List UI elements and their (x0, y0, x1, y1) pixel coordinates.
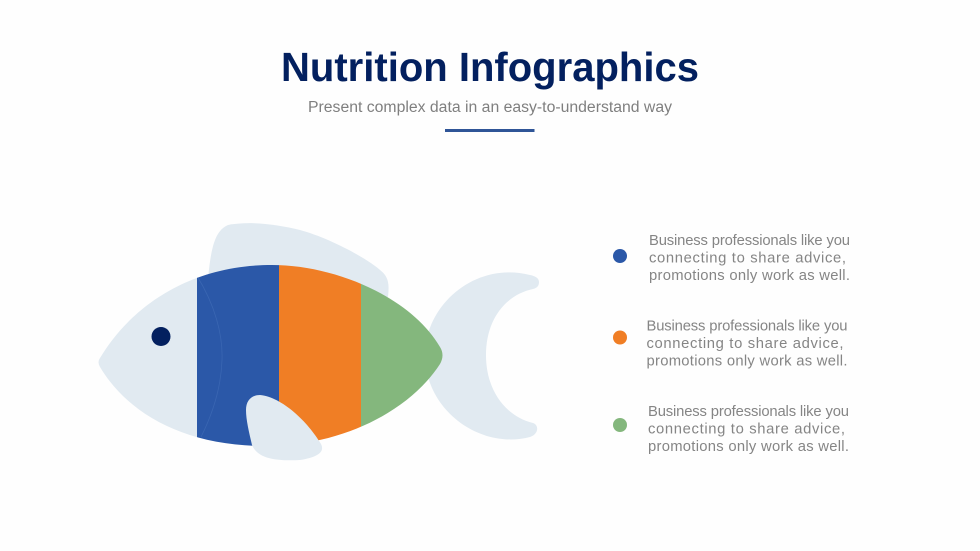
blue text: connecting to share advice, (649, 250, 846, 266)
green text: connecting to share advice, (648, 422, 845, 438)
blue text: Business professionals like you (649, 233, 850, 249)
orange dot (613, 330, 627, 344)
pectoral fin (246, 395, 322, 460)
blue dot (613, 249, 627, 263)
orange text: promotions only work as well. (646, 354, 848, 370)
eye (152, 327, 170, 346)
dorsal fin (208, 223, 389, 297)
body orange section (279, 260, 361, 450)
orange text: connecting to share advice, (646, 336, 844, 352)
title underline (445, 129, 534, 132)
legend item: orange (613, 318, 848, 370)
blue text: promotions only work as well. (649, 268, 850, 284)
green text: promotions only work as well. (648, 439, 849, 455)
body head section (98, 278, 197, 437)
body green section (361, 284, 442, 427)
gill line (197, 276, 222, 437)
orange text: Business professionals like you (646, 318, 848, 334)
title: Nutrition Infographics (281, 44, 699, 90)
legend item: green (613, 404, 849, 455)
tail fin (425, 272, 539, 439)
body blue section (197, 260, 279, 450)
legend item: blue (613, 233, 850, 284)
subtitle: Present complex data in an easy-to-understand way (308, 99, 672, 116)
fish illustration (95, 223, 539, 460)
green dot (613, 418, 627, 432)
fish body (95, 260, 446, 450)
green text: Business professionals like you (648, 404, 849, 420)
